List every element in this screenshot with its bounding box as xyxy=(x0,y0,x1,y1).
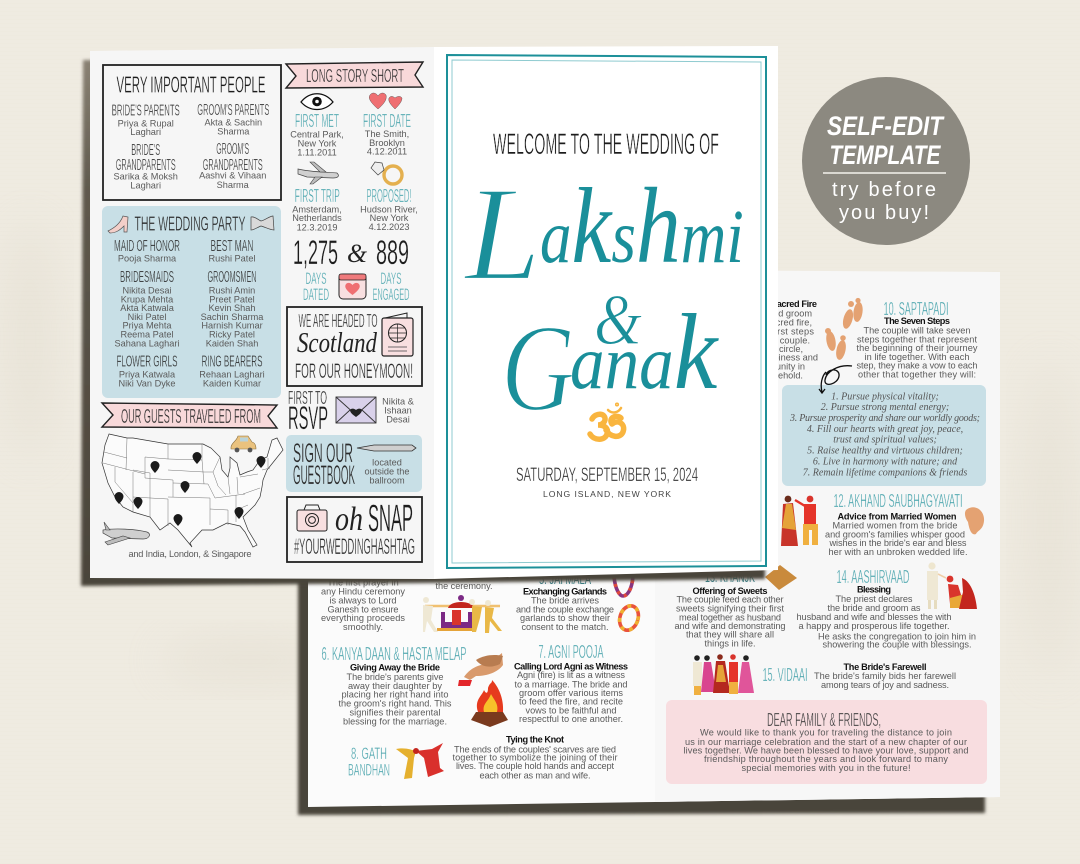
section: 6 kanya daan and hasta melap: placing her right hand into xyxy=(342,690,448,700)
banner: long story short xyxy=(286,62,423,88)
arrow: swirl to vows xyxy=(819,366,852,393)
section: 12 akhand saubhagyavati: her with an unbroken wedded life. xyxy=(828,547,968,557)
icon: hearts xyxy=(369,93,402,109)
panel: honeymoon: Scotland xyxy=(297,327,377,359)
panel: the wedding party: FLOWER GIRLS xyxy=(116,354,178,371)
map: USA with guest pins xyxy=(102,434,283,547)
panel: the wedding party: Pooja Sharma xyxy=(118,254,177,264)
panel: oh snap hashtag xyxy=(287,497,422,562)
section: 5 jai mala: garlands to show their xyxy=(520,613,610,623)
section: 10 saptapadi: in life together. With each xyxy=(864,352,970,362)
panel: oh snap hashtag: oh xyxy=(335,501,363,538)
panel: sign our guestbook: SIGN OUR xyxy=(293,438,353,468)
panel: the wedding party: Preet Patel xyxy=(209,294,255,304)
back sheet: inner ceremony pages xyxy=(298,270,1000,815)
panel: the wedding party: Ricky Patel xyxy=(209,330,255,340)
section: 8 gath bandhan: together to symbolize the joining of their xyxy=(452,753,618,763)
panel: very important people: Priya & Rupal xyxy=(118,119,174,129)
location: LONG ISLAND, NEW YORK xyxy=(543,489,671,499)
panel: dear family and friends: us in our marriage celebration and the start of a new chapter of our xyxy=(685,737,967,747)
panel: very important people: GROOM'S xyxy=(216,141,249,158)
panel: seven vows: 7. Remain lifetime companions & friends xyxy=(803,467,967,478)
badge: self-edit template: SELF-EDIT xyxy=(827,111,945,141)
section: ganesh prayer: any Hindu ceremony xyxy=(321,586,405,596)
section: 15 vidaai: The Bride's Farewell xyxy=(844,662,926,672)
timeline: first met: Central Park, xyxy=(290,130,344,140)
panel: the wedding party: Rushi Patel xyxy=(209,254,255,264)
panel: seven vows: 2. Pursue strong mental energy; xyxy=(821,402,949,413)
panel: sign our guestbook: GUESTBOOK xyxy=(293,460,355,490)
section: 13 offering of sweets: things in life. xyxy=(704,639,756,649)
panel: the wedding party: Nikita Desai xyxy=(122,285,172,295)
section: 14 aashirvaad: 14. AASHIRVAAD xyxy=(836,567,910,587)
section: 7 agni pooja: Calling Lord Agni as Witness xyxy=(514,661,628,671)
section: 14 aashirvaad: The priest declares xyxy=(836,594,913,604)
section: 10 saptapadi: the beginning of their journey xyxy=(856,343,978,353)
section: 13 offering of sweets: 13. KHANJK xyxy=(705,569,755,586)
timeline: first met xyxy=(290,111,344,157)
panel: very important people: VERY IMPORTANT PEOPLE xyxy=(116,72,266,98)
section: 7 agni pooja: respectful to one another. xyxy=(519,714,623,724)
panel: very important people: Sharma xyxy=(217,127,250,137)
section: 14 aashirvaad: Blessing xyxy=(857,585,891,595)
section: 10 saptapadi xyxy=(856,299,978,379)
panel: very important people: Sharma xyxy=(217,180,250,190)
callout: first to rsvp: Desai xyxy=(386,414,410,424)
panel: the wedding party: Kevin Shah xyxy=(208,303,256,313)
panel: seven vows xyxy=(782,385,986,486)
section: ganesh prayer: The first prayer in xyxy=(327,578,399,588)
text: the ceremony: the ceremony. xyxy=(436,581,492,591)
section: sacred fire (partly hidden): the couple. xyxy=(764,335,810,345)
icon: joined hands xyxy=(458,653,503,686)
stat: days dated and engaged: & xyxy=(347,239,368,268)
panel: the wedding party: THE WEDDING PARTY xyxy=(134,213,246,236)
panel: very important people: GROOM'S PARENTS xyxy=(197,102,269,119)
section: 6 kanya daan and hasta melap: away their daughter by xyxy=(348,681,442,691)
icon: eye xyxy=(301,94,333,110)
icon: sacred fire xyxy=(471,680,508,727)
callout: first to rsvp: Nikita & xyxy=(382,396,414,406)
section: 10 saptapadi: step, they make a vow to each xyxy=(856,361,978,371)
section: 10 saptapadi: other that together they will: xyxy=(858,369,976,379)
section: 8 gath bandhan: 8. GATH xyxy=(351,744,387,763)
section: 8 gath bandhan: Tying the Knot xyxy=(506,735,564,745)
timeline: first date xyxy=(363,111,411,157)
panel: sign our guestbook xyxy=(286,435,422,492)
section: 14 aashirvaad: showering the couple with blessings. xyxy=(822,640,972,650)
icon: airplane xyxy=(298,162,338,184)
timeline: first met: 1.11.2011 xyxy=(297,147,337,157)
section: 12 akhand saubhagyavati: and groom's families whisper good xyxy=(825,530,965,540)
panel: very important people: BRIDE'S PARENTS xyxy=(112,103,180,120)
panel: very important people: Laghari xyxy=(130,127,161,137)
panel: very important people: Akta & Sachin xyxy=(204,118,262,128)
icon: camera xyxy=(297,505,327,531)
section: 10 saptapadi: The Seven Steps xyxy=(884,316,950,326)
section: 10 saptapadi: steps together that represent xyxy=(857,334,977,344)
timeline: first trip: Netherlands xyxy=(292,213,342,223)
front sheet: left panel page: PROPOSED! xyxy=(366,186,412,206)
front sheet: left panel page: ENGAGED xyxy=(372,285,410,304)
icon: car xyxy=(231,436,256,452)
section: 5 jai mala: The bride arrives xyxy=(531,595,599,605)
name: Lakshmi: L xyxy=(463,160,541,309)
icon: passport xyxy=(382,313,413,356)
section: 15 vidaai: among tears of joy and sadness. xyxy=(821,680,949,690)
section: sacred fire (partly hidden): unity in xyxy=(776,361,805,371)
icon: tied scarves xyxy=(396,743,444,779)
timeline: first date: The Smith, xyxy=(365,129,409,139)
section: 13 offering of sweets: Offering of Sweets xyxy=(692,586,768,596)
panel: the wedding party: Priya Mehta xyxy=(122,321,172,331)
panel: dear family and friends: lives together. We have been blessed to have your love, support and xyxy=(684,746,968,756)
panel: very important people: BRIDE'S xyxy=(131,142,160,159)
panel: the wedding party: Priya Katwala xyxy=(119,370,176,380)
panel: the wedding party: GROOMSMEN xyxy=(208,269,256,286)
section: 6 kanya daan and hasta melap: 6. KANYA DAAN & HASTA MELAP xyxy=(322,644,466,664)
section: 6 kanya daan and hasta melap: blessing for the marriage. xyxy=(343,716,447,726)
panel: the wedding party: RING BEARERS xyxy=(202,354,262,371)
section: 14 aashirvaad xyxy=(796,567,976,650)
ampersand: & xyxy=(594,280,642,360)
timeline: proposed: New York xyxy=(370,213,409,223)
panel: very important people: GRANDPARENTS xyxy=(203,157,263,174)
front sheet: left panel page xyxy=(90,47,434,579)
section: 15 vidaai: 15. VIDAAI xyxy=(762,665,808,685)
stat: days dated and engaged: 889 xyxy=(376,234,409,272)
panel: the wedding party: Krupa Mehta xyxy=(121,294,174,304)
section: 5 jai mala: 5. JAI MALA xyxy=(539,571,591,587)
stat: days dated and engaged: DAYS xyxy=(306,269,326,288)
panel: the wedding party: Niki Patel xyxy=(128,312,166,322)
callout: first to rsvp xyxy=(288,388,414,436)
panel: seven vows: 6. Live in harmony with nature; and xyxy=(813,457,958,468)
panel: the wedding party: Kaiden Kumar xyxy=(203,378,261,388)
panel: honeymoon xyxy=(287,307,422,386)
panel: oh snap hashtag: SNAP xyxy=(368,498,413,540)
icon: diamond ring xyxy=(371,162,402,184)
section: 8 gath bandhan: BANDHAN xyxy=(348,761,390,780)
front sheet: left panel page: FIRST TRIP xyxy=(295,186,340,206)
icon: sweet xyxy=(765,565,797,590)
timeline: first trip: 12.3.2019 xyxy=(297,222,337,232)
name: Lakshmi xyxy=(463,160,744,309)
section: 5 jai mala: and the couple exchange xyxy=(516,604,614,614)
section: ganesh prayer: is always to Lord xyxy=(330,595,396,605)
timeline: first met: FIRST MET xyxy=(295,111,339,131)
section: 13 offering of sweets: sweets signifying their first xyxy=(676,604,784,614)
panel: the wedding party: Akta Katwala xyxy=(120,303,175,313)
section: 13 offering of sweets: The couple feed each other xyxy=(676,595,784,605)
name: Ganak: anak xyxy=(570,293,719,412)
front sheet: cover page xyxy=(434,46,778,579)
section: ganesh prayer: Ganesh to ensure xyxy=(328,604,398,614)
icon: garlands xyxy=(614,576,641,633)
section: 7 agni pooja: to feed the fire, and recite xyxy=(519,697,623,707)
panel: very important people: GRANDPARENTS xyxy=(116,157,176,174)
panel: the wedding party: MAID OF HONOR xyxy=(114,238,180,255)
section: 13 offering of sweets: that they will share all xyxy=(686,630,774,640)
panel: very important people: Laghari xyxy=(130,181,161,191)
section: 13 offering of sweets xyxy=(674,569,786,649)
panel: honeymoon: FOR OUR HONEYMOON! xyxy=(295,360,413,383)
section: 5 jai mala: consent to the match. xyxy=(522,622,608,632)
section: sacred fire (partly hidden): happiness and xyxy=(758,353,818,363)
icon: airplane (map) xyxy=(103,522,150,545)
callout: first to rsvp: FIRST TO xyxy=(288,388,327,408)
panel: very important people: Aashvi & Vihaan xyxy=(199,171,266,181)
timeline: proposed: 4.12.2023 xyxy=(369,222,409,232)
badge: self-edit template: try before xyxy=(832,179,936,201)
panel: seven vows: 5. Raise healthy and virtuous children; xyxy=(807,446,963,457)
section: 7 agni pooja: Agni (fire) is lit as a witness xyxy=(517,670,625,680)
panel: dear family and friends: We would like to thank you for traveling the distance to join xyxy=(700,728,952,738)
section: 7 agni pooja: vows to be faithful and xyxy=(526,705,616,715)
section: sacred fire (partly hidden): Sacred Fire xyxy=(771,299,817,309)
panel: sign our guestbook: ballroom xyxy=(369,476,405,486)
icon: bride and groom xyxy=(781,496,818,546)
timeline: proposed xyxy=(360,186,418,232)
section: 6 kanya daan and hasta melap xyxy=(322,644,466,726)
timeline: first trip xyxy=(292,186,342,232)
panel: seven vows: 1. Pursue physical vitality; xyxy=(831,391,939,402)
stat: days dated and engaged: DATED xyxy=(303,285,329,304)
icon: ear xyxy=(965,507,984,534)
timeline: first met: New York xyxy=(298,139,337,149)
section: sacred fire (partly hidden): household. xyxy=(758,370,803,380)
icon: palanquin xyxy=(423,595,502,633)
badge: self-edit template: you buy! xyxy=(839,202,929,224)
section: 6 kanya daan and hasta melap: the groom's right hand. This xyxy=(338,699,452,709)
section: 14 aashirvaad: a happy and prosperous life together. xyxy=(798,621,950,631)
section: 7 agni pooja xyxy=(514,642,628,724)
panel: dear family and friends: special memories with you in the future! xyxy=(742,763,910,773)
panel: the wedding party: Kaiden Shah xyxy=(206,338,258,348)
name: Ganak xyxy=(501,293,719,438)
section: sacred fire (partly hidden): first steps xyxy=(772,326,814,336)
text: other countries: and India, London, & Singapore xyxy=(128,549,252,559)
panel: dear family and friends: friendship throughout the years and look forward to many xyxy=(704,754,948,764)
section: sacred fire (partly hidden): and groom xyxy=(768,309,812,319)
icon: bow tie xyxy=(251,216,274,230)
panel: very important people: Sarika & Moksh xyxy=(114,171,178,181)
panel: the wedding party: Rehaan Laghari xyxy=(199,370,265,380)
panel: dear family and friends: DEAR FAMILY & FRIENDS, xyxy=(767,710,881,730)
section: sacred fire (partly hidden) xyxy=(758,299,818,380)
section: 10 saptapadi: The couple will take seven xyxy=(864,325,970,335)
section: sacred fire (partly hidden): circle, xyxy=(779,344,803,354)
banner: our guests traveled from xyxy=(102,403,277,428)
shadow: front sheet xyxy=(81,60,765,586)
panel: the wedding party: Niki Van Dyke xyxy=(118,378,176,388)
section: 6 kanya daan and hasta melap: The bride's parents give xyxy=(346,672,444,682)
panel: seven vows: 4. Fill our hearts with great joy, peace, xyxy=(807,424,963,435)
section: 7 agni pooja: groom offer various items xyxy=(519,688,623,698)
panel: very important people xyxy=(103,65,281,200)
timeline: first date: Brooklyn xyxy=(369,138,405,148)
panel: the wedding party: Harnish Kumar xyxy=(201,321,263,331)
section: 6 kanya daan and hasta melap: Giving Away the Bride xyxy=(350,663,440,673)
text: #YOURWEDDINGHASHTAG xyxy=(294,534,415,559)
section: 5 jai mala: Exchanging Garlands xyxy=(523,586,607,596)
section: ganesh prayer: everything proceeds xyxy=(321,613,405,623)
section: 7 agni pooja: to a marriage. The bride and xyxy=(514,679,628,689)
icon: location pins xyxy=(114,452,266,526)
section: 8 gath bandhan: The ends of the couples' scarves are tied xyxy=(454,744,616,754)
section: 14 aashirvaad: husband and wife and blesses the with xyxy=(796,612,952,622)
timeline: first date: 4.12.2011 xyxy=(367,147,407,157)
icon: pen xyxy=(357,445,416,451)
section: 14 aashirvaad: He asks the congregation to join him in xyxy=(818,631,976,641)
panel: the wedding party: Sachin Sharma xyxy=(201,312,264,322)
front sheet: cover page: WELCOME TO THE WEDDING OF xyxy=(493,128,719,161)
panel: seven vows: 3. Pursue prosperity and share our worldly goods; xyxy=(789,413,980,424)
panel: honeymoon: WE ARE HEADED TO xyxy=(298,311,378,331)
icon: five wedding figures xyxy=(693,654,754,695)
panel: dear family and friends xyxy=(666,700,987,784)
stat: days dated and engaged xyxy=(293,234,410,304)
icon: om symbol xyxy=(590,404,624,439)
section: 7 agni pooja: 7. AGNI POOJA xyxy=(538,642,604,662)
section: 15 vidaai: The bride's family bids her farewell xyxy=(814,671,956,681)
section: 12 akhand saubhagyavati: Married women from the bride xyxy=(832,521,958,531)
section: 13 offering of sweets: and wife and demonstrating xyxy=(674,621,786,631)
timeline: proposed: Hudson River, xyxy=(360,204,418,214)
panel: sign our guestbook: outside the xyxy=(365,467,409,477)
name: Lakshmi: akshmi xyxy=(540,167,744,286)
section: 8 gath bandhan xyxy=(348,735,618,780)
section: 15 vidaai xyxy=(762,662,956,690)
stat: days dated and engaged: DAYS xyxy=(380,269,402,288)
section: 12 akhand saubhagyavati: Advice from Married Women xyxy=(838,511,957,521)
section: 10 saptapadi: 10. SAPTAPADI xyxy=(884,299,948,319)
panel: the wedding party: Rushi Amin xyxy=(209,285,255,295)
cover border xyxy=(447,55,766,568)
panel: the wedding party: Sahana Laghari xyxy=(115,338,179,348)
date: SATURDAY, SEPTEMBER 15, 2024 xyxy=(516,465,698,486)
banner: long story short: LONG STORY SHORT xyxy=(306,66,404,86)
stat: days dated and engaged: 1,275 xyxy=(293,234,338,272)
panel: the wedding party: Reema Patel xyxy=(120,330,174,340)
badge: self-edit template: TEMPLATE xyxy=(830,140,941,170)
section: 5 jai mala xyxy=(516,571,614,632)
section: 12 akhand saubhagyavati: wishes in the bride's ear and bless xyxy=(828,538,967,548)
section: sacred fire (partly hidden): sacred fire, xyxy=(766,318,812,328)
badge: self-edit template xyxy=(802,77,970,245)
icon: calendar with heart xyxy=(339,274,366,299)
panel: sign our guestbook: located xyxy=(372,458,402,468)
icon: footprints xyxy=(825,298,864,361)
panel: the wedding party xyxy=(102,206,281,398)
timeline: first trip: Amsterdam, xyxy=(292,204,342,214)
section: 6 kanya daan and hasta melap: signifies their parental xyxy=(350,707,440,717)
panel: the wedding party: BRIDESMAIDS xyxy=(120,269,174,286)
section: 12 akhand saubhagyavati xyxy=(825,491,968,557)
section: 8 gath bandhan: each other as man and wife. xyxy=(480,770,590,780)
section: 8 gath bandhan: lives. The couple hold hands and accept xyxy=(456,761,614,771)
name: Ganak: G xyxy=(501,300,575,438)
front sheet: left panel page: FIRST DATE xyxy=(363,111,411,131)
section: ganesh prayer: smoothly. xyxy=(343,622,383,632)
panel: seven vows: trust and spiritual values; xyxy=(833,435,937,446)
section: 13 offering of sweets: meal together as husband xyxy=(679,612,781,622)
callout: first to rsvp: Ishaan xyxy=(384,406,412,416)
icon: envelope xyxy=(336,397,376,423)
callout: first to rsvp: RSVP xyxy=(288,400,328,436)
icon: priest blessing couple xyxy=(927,562,977,609)
section: 14 aashirvaad: the bride and groom as xyxy=(828,603,921,613)
icon: shoe xyxy=(108,216,128,233)
panel: the wedding party: BEST MAN xyxy=(210,238,254,255)
section: ganesh prayer xyxy=(321,578,405,632)
banner: our guests traveled from: OUR GUESTS TRAVELED FROM xyxy=(121,406,261,428)
